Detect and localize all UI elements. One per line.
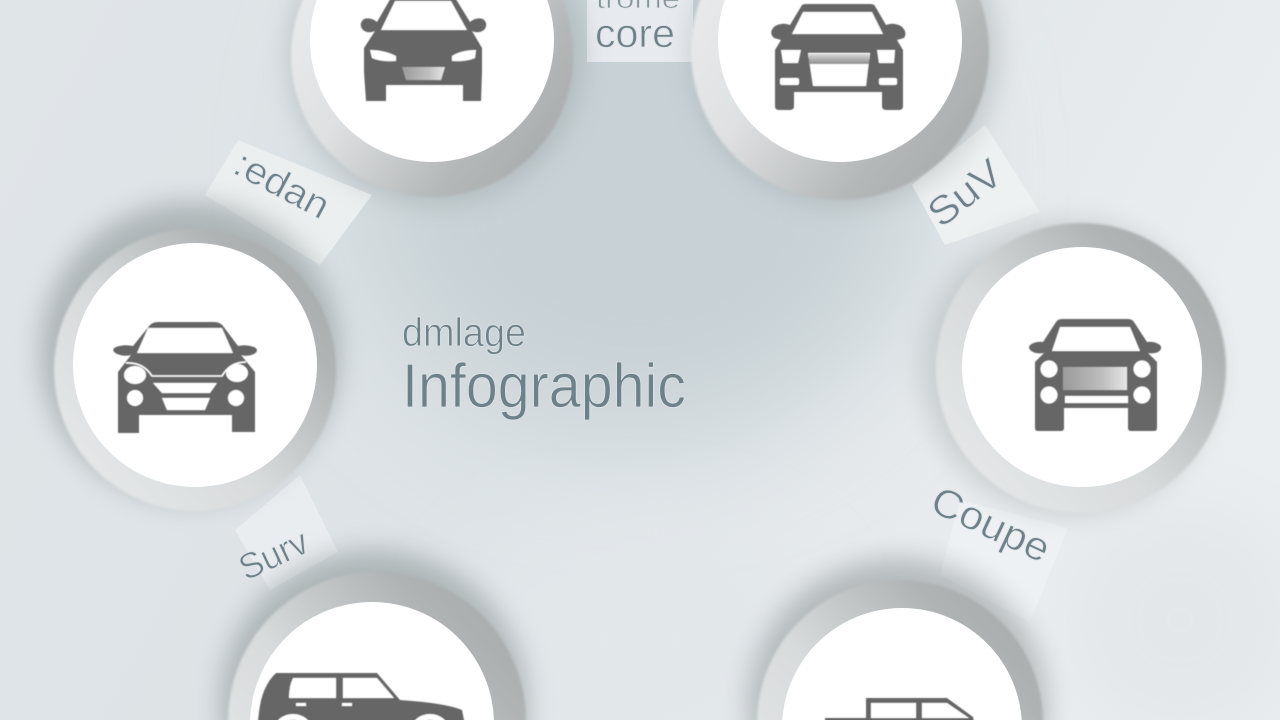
icon: car side 6 [825,698,976,720]
circle: bottom left car [220,550,528,720]
circle: right car [922,220,1226,516]
label: Surv: Surv [232,521,315,588]
label: sedan: :edan [227,143,337,228]
label: Coupe: Coupe [924,478,1057,571]
circle: left car [40,202,340,511]
subtitle: dmlage [402,311,526,355]
panel: coupe label tab [924,478,1068,622]
title block [402,311,686,421]
main title: Infographic [402,352,686,421]
icon: car front 3 [113,322,257,433]
circle: top left sedan [288,0,584,204]
label: SUV: SuV [919,151,1011,236]
icon: car front 1 [361,0,486,101]
icon: car side 5 [257,673,466,720]
label: core: core [595,12,675,56]
panel: sedan label tab [205,140,372,265]
panel: top label tab [587,0,693,62]
panel: surv label tab [232,475,338,590]
panel: SUV label tab [912,125,1040,245]
circle: bottom right car [748,558,1048,720]
circle: top right car [690,0,998,206]
icon: car front 2 [771,4,905,110]
icon: car front 4 [1029,319,1161,431]
